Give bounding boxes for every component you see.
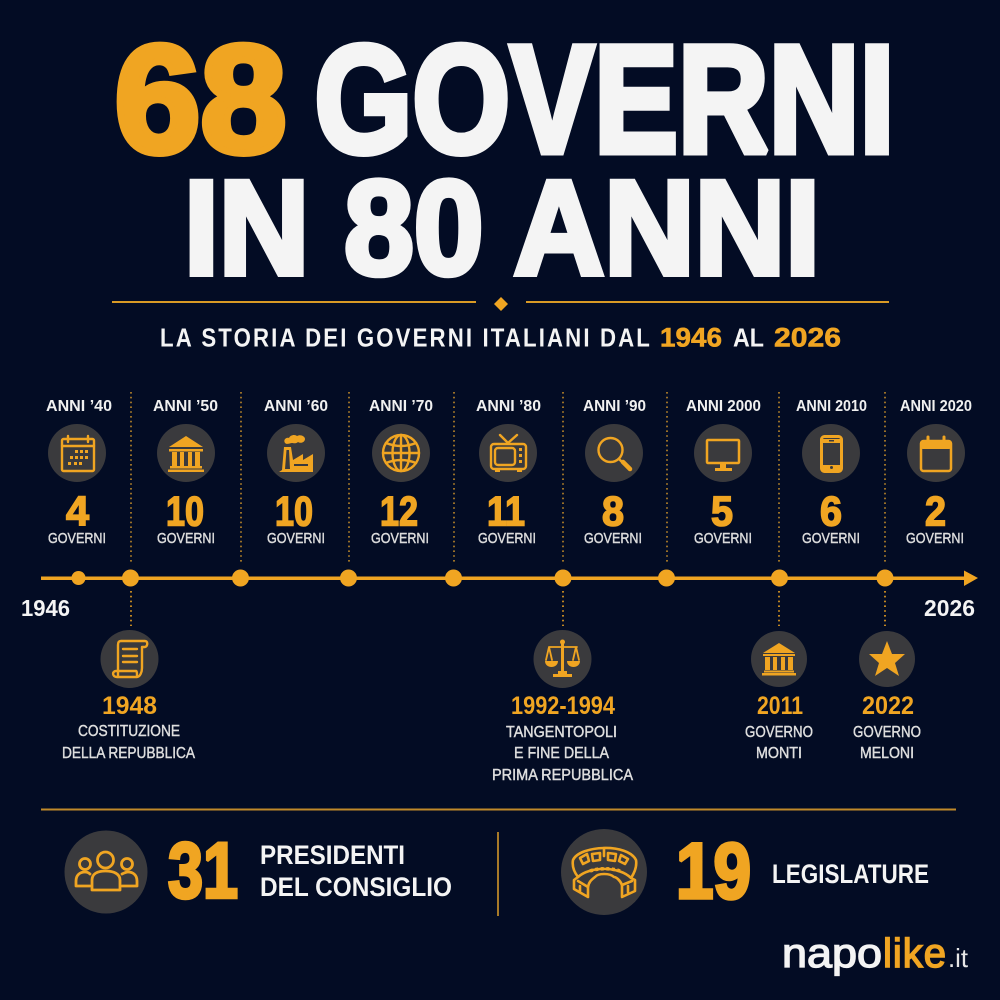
decade column: anni 80: ANNI ’80 <box>476 398 541 415</box>
decade column: anni 60: ANNI ’60 <box>264 398 328 415</box>
icon: scales of justice <box>545 640 580 677</box>
decade column: anni 2000: ANNI 2000 <box>686 398 761 415</box>
stat: presidenti del consiglio: 31 <box>168 826 238 914</box>
icon: smartphone <box>822 436 842 472</box>
icon: blank calendar <box>921 437 951 471</box>
milestone: 2022: 2022 <box>862 692 914 720</box>
milestone: 2022: GOVERNO <box>853 724 921 741</box>
bottom divider <box>41 808 956 810</box>
milestone: 1948: DELLA REPUBBLICA <box>62 745 195 762</box>
milestone: 1992-1994: PRIMA REPUBBLICA <box>492 767 633 784</box>
stat: legislature <box>561 826 929 915</box>
timeline axis <box>41 570 978 586</box>
decade column: anni 40: 4 <box>66 488 90 534</box>
icon: magnifying glass <box>598 438 630 469</box>
decade column: anni 2010 <box>796 398 867 547</box>
decade column: anni 40: GOVERNI <box>48 530 106 547</box>
milestone: 1992-1994: TANGENTOPOLI <box>506 724 617 741</box>
decade column: anni 90: GOVERNI <box>584 530 642 547</box>
decade column: anni 90: 8 <box>602 488 624 534</box>
icon: star <box>869 641 905 676</box>
decade column: anni 2020 <box>900 398 972 547</box>
decade column: anni 80 <box>476 398 541 547</box>
decade column: anni 2020: 2 <box>925 488 946 534</box>
icon: parliament building <box>762 643 796 676</box>
title <box>114 14 894 303</box>
stat: presidenti del consiglio: PRESIDENTI <box>260 840 405 870</box>
decade column: anni 2020: GOVERNI <box>906 530 964 547</box>
decade column: anni 2010: 6 <box>820 488 842 534</box>
logo: napolike.it <box>782 930 969 976</box>
decade column: anni 40: ANNI ’40 <box>46 398 112 415</box>
decade column: anni 2020: ANNI 2020 <box>900 398 972 415</box>
decade column: anni 70: 12 <box>380 488 418 534</box>
start year label: 1946 <box>21 595 70 621</box>
milestone: 2011: GOVERNO <box>745 724 813 741</box>
decade column: anni 70: ANNI ’70 <box>369 398 433 415</box>
logo: napolike.it: like <box>883 930 947 976</box>
stat: presidenti del consiglio: DEL CONSIGLIO <box>260 872 452 902</box>
icon: calendar <box>62 436 94 471</box>
decade column: anni 60: GOVERNI <box>267 530 325 547</box>
decade column: anni 60: 10 <box>275 488 313 534</box>
milestone: 2011 <box>745 631 813 762</box>
decade column: anni 50 <box>153 398 218 547</box>
icon: factory <box>279 435 313 472</box>
subtitle: 2026 <box>774 322 841 352</box>
stat: legislature: 19 <box>676 826 751 915</box>
stat: presidenti del consiglio <box>64 826 452 914</box>
milestone: 2011: 2011 <box>757 692 803 720</box>
decade column: anni 50: GOVERNI <box>157 530 215 547</box>
title divider with diamond <box>112 297 889 311</box>
subtitle: LA STORIA DEI GOVERNI ITALIANI DAL <box>160 322 652 352</box>
decade separators <box>131 392 885 626</box>
decade column: anni 90 <box>583 398 646 547</box>
milestone: 1948: 1948 <box>102 692 157 720</box>
icon: scroll <box>113 641 147 677</box>
subtitle: AL <box>733 322 764 352</box>
milestone: 1992-1994 <box>492 630 633 784</box>
decade column: anni 90: ANNI ’90 <box>583 398 646 415</box>
decade column: anni 50: ANNI ’50 <box>153 398 218 415</box>
decade column: anni 2000: 5 <box>711 488 733 534</box>
decade column: anni 40 <box>46 398 112 547</box>
milestone: 1948: COSTITUZIONE <box>78 723 180 740</box>
stat: legislature: LEGISLATURE <box>772 859 929 889</box>
icon: television <box>491 435 526 472</box>
title: 68 <box>114 14 286 185</box>
milestone: 2022: MELONI <box>860 745 914 762</box>
decade column: anni 70 <box>369 398 433 547</box>
logo: napolike.it: napo <box>782 930 882 976</box>
title: IN 80 ANNI <box>184 154 820 303</box>
milestone: 2022 <box>853 631 921 762</box>
icon: colosseum <box>573 848 636 897</box>
decade column: anni 80: 11 <box>487 488 525 534</box>
decade column: anni 60 <box>264 398 328 547</box>
milestone: 1992-1994: 1992-1994 <box>511 692 615 720</box>
decade column: anni 80: GOVERNI <box>478 530 536 547</box>
icon: desktop monitor <box>707 440 739 471</box>
milestone: 2011: MONTI <box>756 745 802 762</box>
decade column: anni 2000: GOVERNI <box>694 530 752 547</box>
icon: institution building <box>168 436 204 472</box>
subtitle: 1946 <box>660 322 722 352</box>
decade column: anni 2000 <box>686 398 761 547</box>
decade column: anni 50: 10 <box>166 488 204 534</box>
decade column: anni 2010: ANNI 2010 <box>796 398 867 415</box>
icon: group of people <box>76 852 137 890</box>
milestone: 1948 <box>62 630 195 762</box>
title: GOVERNI <box>314 14 894 185</box>
stat divider <box>497 832 499 916</box>
icon: globe <box>383 435 419 471</box>
decade column: anni 2010: GOVERNI <box>802 530 860 547</box>
milestone: 1992-1994: E FINE DELLA <box>514 745 609 762</box>
decade column: anni 70: GOVERNI <box>371 530 429 547</box>
end year label: 2026 <box>924 595 975 621</box>
logo: napolike.it: .it <box>948 943 969 973</box>
